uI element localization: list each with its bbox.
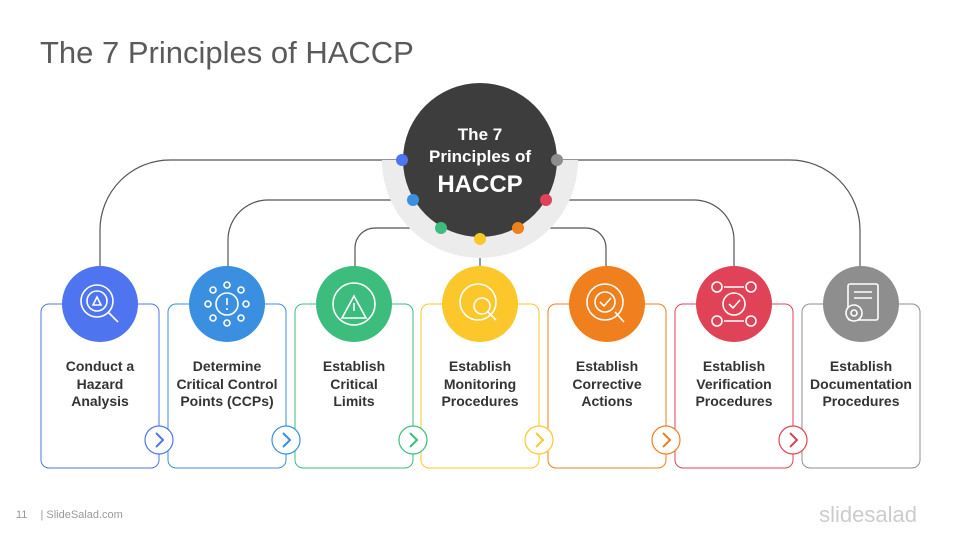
card 6: Establish bbox=[703, 358, 765, 374]
central hub: The 7 bbox=[458, 125, 502, 144]
card 1: Conduct a bbox=[66, 358, 134, 374]
footer: 11 | SlideSalad.com bbox=[16, 509, 123, 521]
card 6: Procedures bbox=[695, 393, 773, 409]
card 7: Procedures bbox=[822, 393, 900, 409]
central hub: Principles of bbox=[429, 147, 531, 166]
card 2: Determine bbox=[193, 358, 261, 374]
card 7: Documentation bbox=[810, 376, 912, 392]
card 6: Verification bbox=[696, 376, 772, 392]
card 2 bbox=[168, 266, 286, 468]
card 3: Establish bbox=[323, 358, 385, 374]
connector lines bbox=[100, 160, 860, 268]
card 3: Limits bbox=[333, 393, 375, 409]
card 7 bbox=[802, 266, 920, 468]
logo: slidesalad bbox=[819, 502, 917, 527]
central hub: HACCP bbox=[437, 171, 523, 198]
card 7: Establish bbox=[830, 358, 892, 374]
card 3 bbox=[295, 266, 413, 468]
card 1: Analysis bbox=[71, 393, 129, 409]
card 4: Procedures bbox=[441, 393, 519, 409]
card 2: Points (CCPs) bbox=[180, 393, 274, 409]
card 5: Actions bbox=[581, 393, 633, 409]
card 5: Corrective bbox=[572, 376, 642, 392]
card 3: Critical bbox=[330, 376, 378, 392]
title: The 7 Principles of HACCP bbox=[40, 35, 414, 70]
central hub bbox=[382, 83, 578, 258]
card 4 bbox=[421, 266, 539, 468]
card 5: Establish bbox=[576, 358, 638, 374]
card 4: Monitoring bbox=[444, 376, 516, 392]
card 1 bbox=[41, 266, 159, 468]
card 4: Establish bbox=[449, 358, 511, 374]
card 2: Critical Control bbox=[176, 376, 278, 392]
card 6 bbox=[675, 266, 793, 468]
chevron arrows bbox=[145, 426, 807, 454]
card 5 bbox=[548, 266, 666, 468]
card 1: Hazard bbox=[77, 376, 123, 392]
